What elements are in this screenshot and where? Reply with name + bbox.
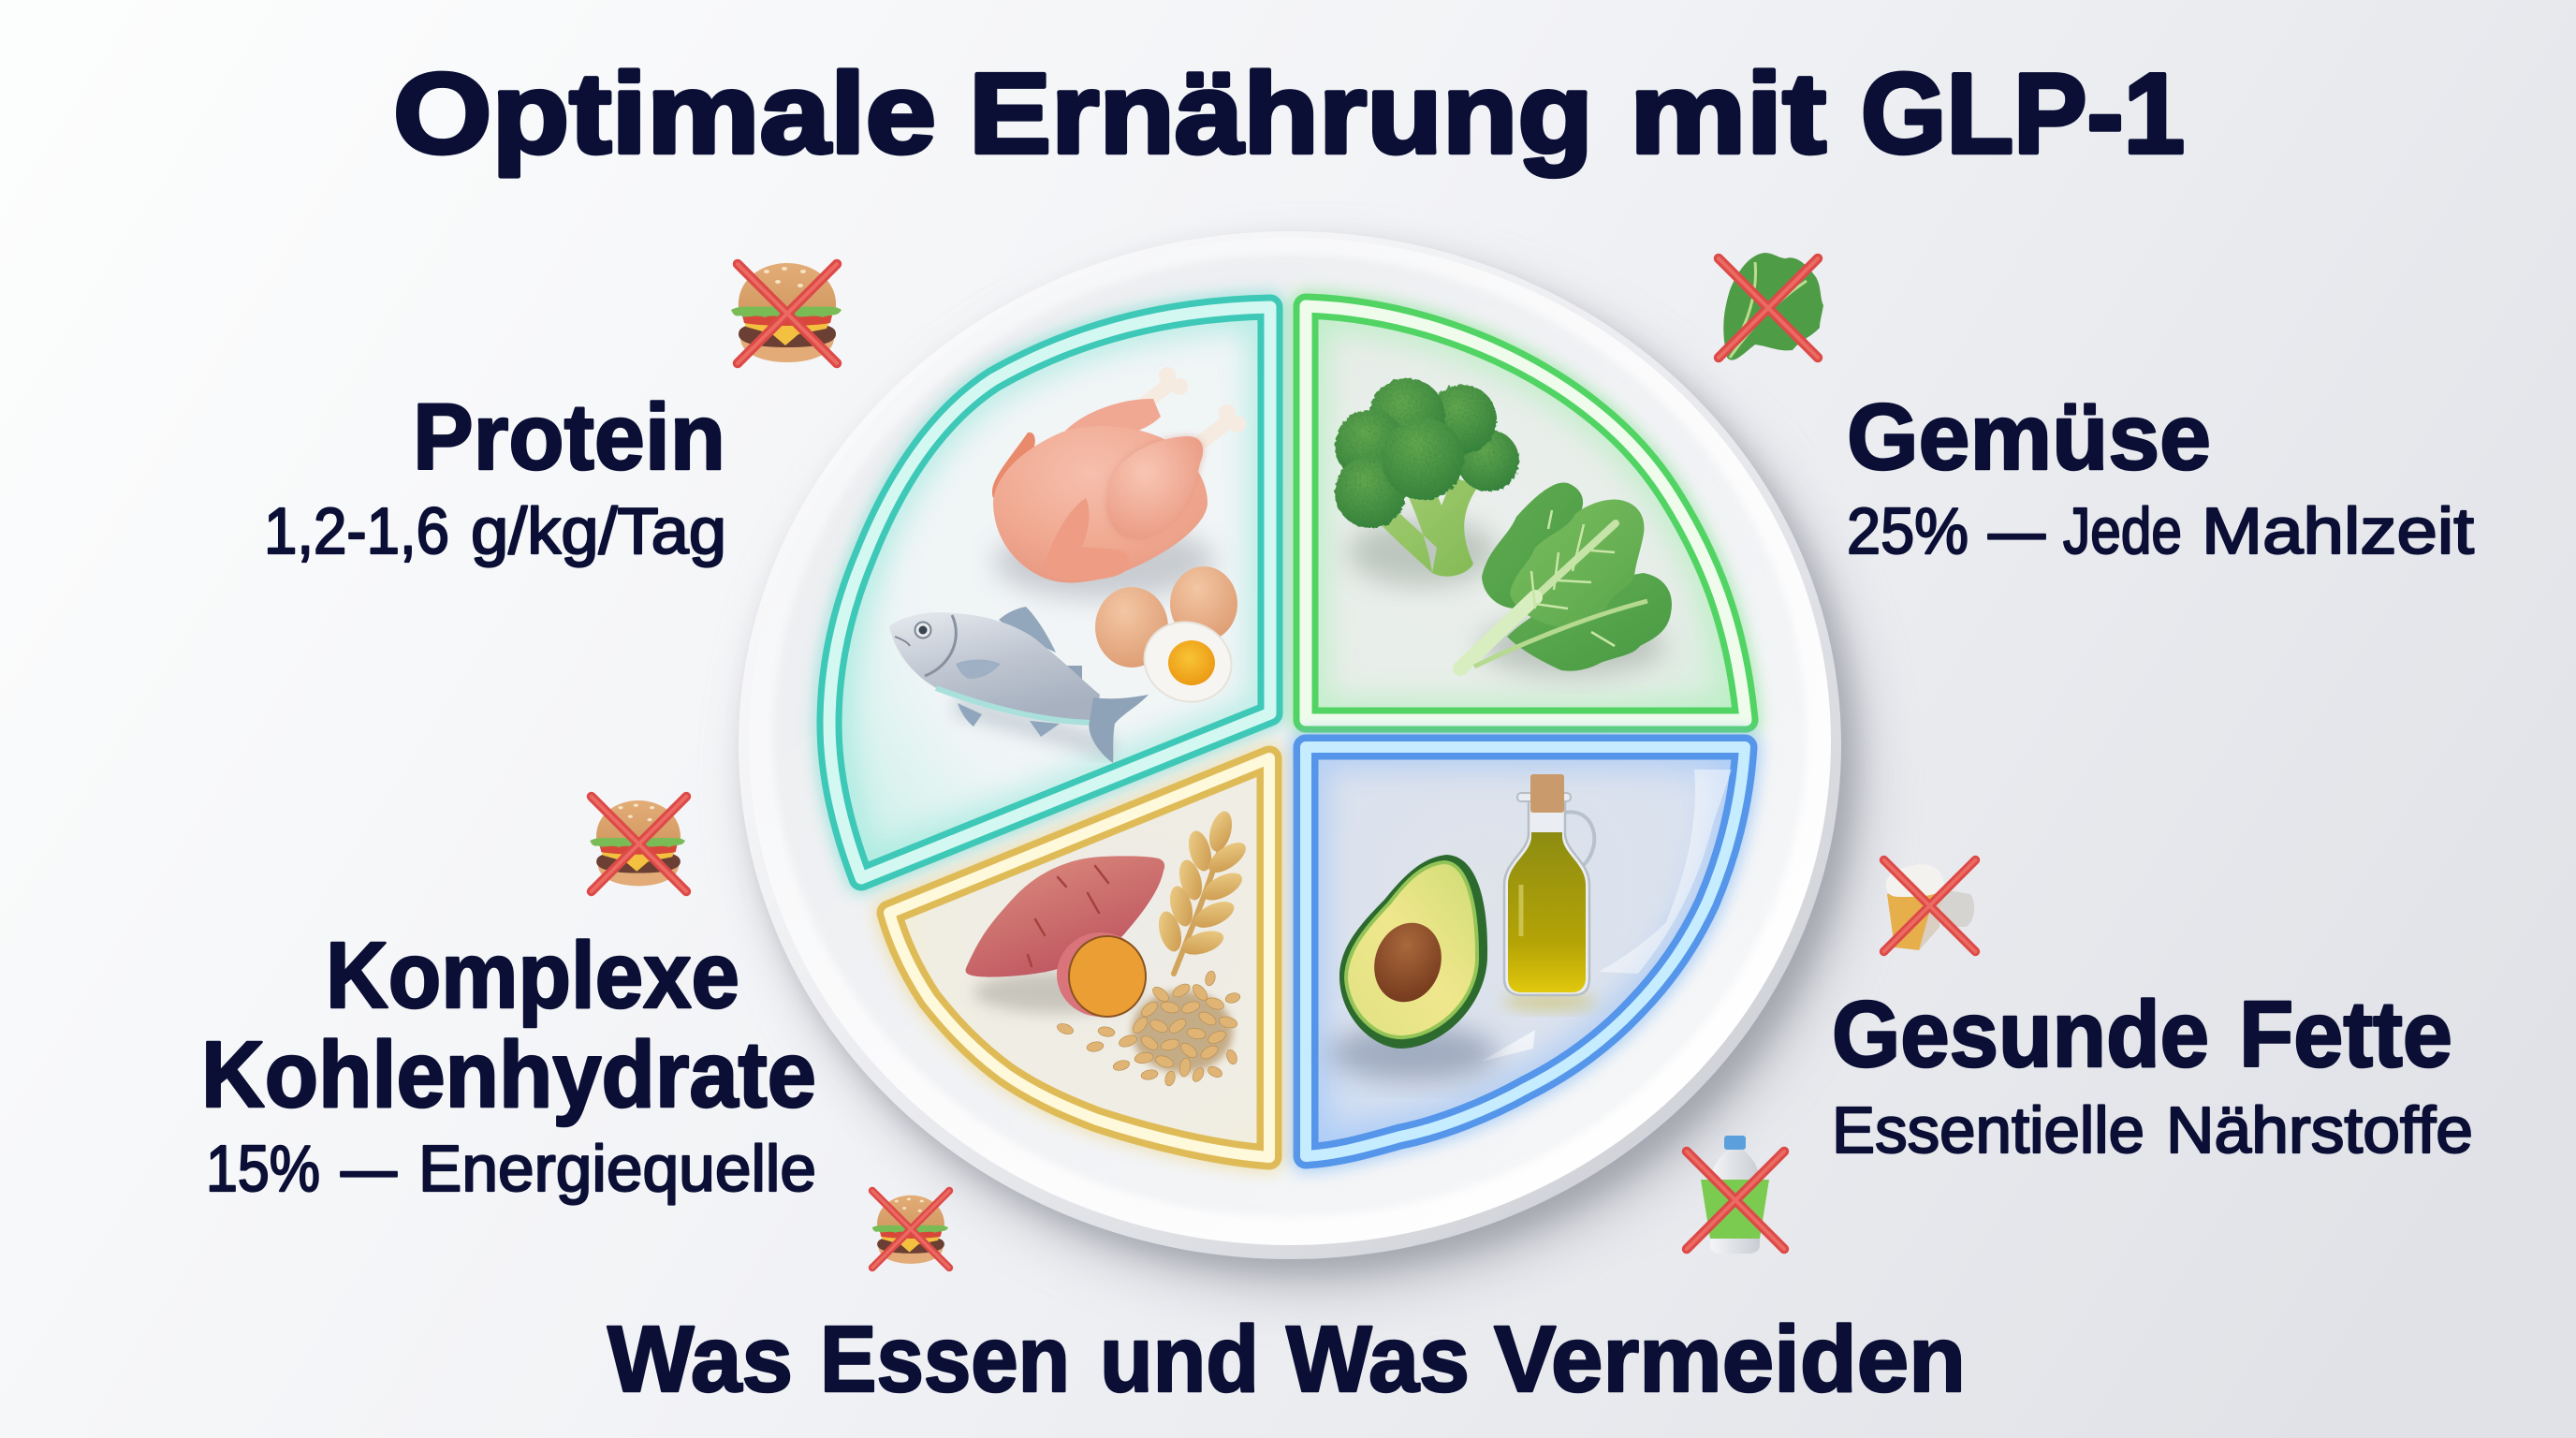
text: vegetables amount: —: [1988, 494, 2045, 567]
icon: crossed leaf: [1719, 253, 1823, 360]
icon: crossed burger bottom: [872, 1191, 949, 1268]
text: protein amount: [264, 494, 726, 567]
icon: fish: [889, 607, 1149, 763]
title: mit: [1630, 50, 1826, 177]
icon: grain pile: [1056, 970, 1241, 1087]
footer heading: Vermeiden: [1494, 1307, 1966, 1412]
text: vegetables amount: Mahlzeit: [2202, 494, 2474, 567]
panel: carbohydrates quadrant: [889, 758, 1269, 1157]
icon: olive oil bottle: [1502, 774, 1596, 1011]
footer heading: Essen: [820, 1307, 1070, 1412]
icon: crossed burger top: [731, 263, 842, 363]
icon: wheat ear: [1155, 809, 1251, 974]
icon: sweet potato: [966, 856, 1164, 1017]
panel: vegetables quadrant: [1306, 306, 1746, 720]
footer heading: Was: [1286, 1307, 1470, 1412]
text: carbohydrates amount: 15%: [206, 1132, 320, 1205]
heading: Komplexe Kohlenhydrate: Kohlenhydrate: [201, 1022, 816, 1127]
icon: avocado: [1329, 855, 1498, 1081]
text: protein amount: g/kg/Tag: [471, 494, 726, 567]
icon: crossed beer mug: [1884, 860, 1975, 951]
text: vegetables amount: [1847, 494, 2474, 567]
heading: Komplexe Kohlenhydrate: [201, 923, 816, 1127]
text: healthy fats note: [1832, 1093, 2473, 1167]
title: Ernährung: [969, 50, 1593, 177]
footer heading: [607, 1307, 1966, 1412]
text: carbohydrates amount: [206, 1132, 816, 1205]
text: carbohydrates amount: —: [341, 1132, 397, 1205]
text: healthy fats note: Essentielle: [1832, 1093, 2144, 1167]
heading: Gesunde Fette: Gesunde: [1832, 982, 2209, 1087]
footer heading: und: [1100, 1307, 1259, 1412]
title: Optimale: [393, 50, 936, 177]
icon: broccoli: [1335, 378, 1519, 586]
icon: eggs: [1095, 566, 1243, 714]
heading: Gesunde Fette: [1832, 982, 2452, 1087]
text: protein amount: 1,2-1,6: [264, 494, 449, 567]
icon: spinach leaves: [1460, 482, 1672, 676]
icon: crossed burger left: [590, 797, 686, 891]
icon: chicken: [992, 367, 1246, 599]
text: carbohydrates amount: Energiequelle: [418, 1132, 816, 1205]
heading: Gesunde Fette: Fette: [2239, 982, 2452, 1087]
text: vegetables amount: 25%: [1847, 494, 1969, 567]
text: vegetables amount: Jede: [2063, 494, 2182, 567]
panel: protein quadrant: [829, 307, 1270, 878]
text: healthy fats note: Nährstoffe: [2166, 1093, 2473, 1167]
heading: Protein: Protein: [413, 385, 725, 490]
footer heading: Was: [607, 1307, 793, 1412]
panel: healthy fats quadrant: [1306, 747, 1745, 1156]
heading: Komplexe Kohlenhydrate: Komplexe: [326, 923, 739, 1028]
plate: [739, 231, 1863, 1288]
title: GLP-1: [1861, 50, 2185, 177]
icon: crossed bottle: [1687, 1136, 1784, 1254]
title: [393, 50, 2185, 177]
heading: Gemüse: Gemüse: [1847, 385, 2211, 490]
